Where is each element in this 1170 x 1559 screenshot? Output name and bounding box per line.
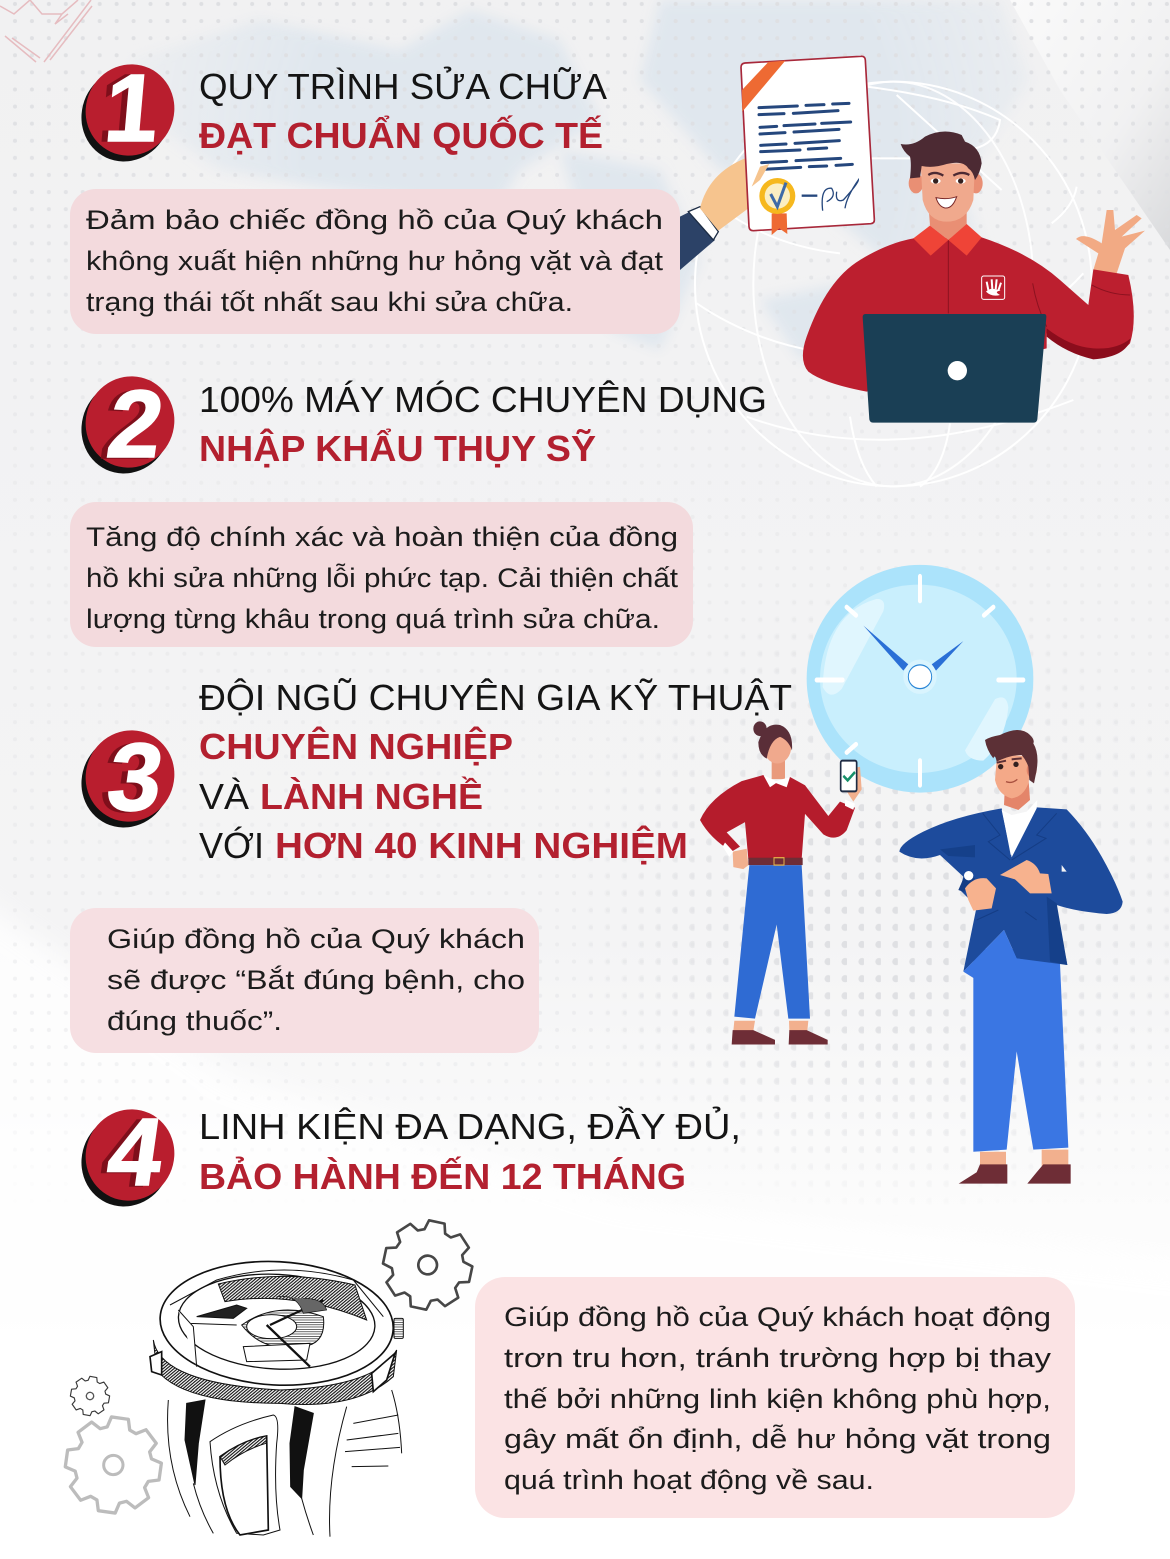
step 4 badge: 4 bbox=[101, 1099, 170, 1206]
man in red shirt with laptop bbox=[803, 132, 1145, 423]
step 2 description: lượng từng khâu trong quá trình sửa chữa. bbox=[86, 604, 660, 634]
hand holding certificate bbox=[680, 157, 769, 270]
step 2 badge bbox=[66, 362, 189, 488]
step 3 heading: VỚI bbox=[199, 825, 264, 866]
step 2 badge: 2 bbox=[95, 372, 164, 479]
gear gray bbox=[60, 1412, 167, 1518]
step 2 description: hồ khi sửa những lỗi phức tạp. Cải thiện chất bbox=[86, 562, 679, 593]
step 4 description: quá trình hoạt động về sau. bbox=[504, 1465, 874, 1495]
step 3 description: Giúp đồng hồ của Quý khách bbox=[107, 924, 525, 954]
step 1 description: Đảm bảo chiếc đồng hồ của Quý khách bbox=[86, 205, 663, 235]
step 2 heading: NHẬP KHẨU THỤY SỸ bbox=[199, 427, 596, 469]
laptop bbox=[863, 314, 1046, 423]
step 4 description: thế bởi những linh kiện không phù hợp, bbox=[504, 1384, 1051, 1414]
step 3 heading: ĐỘI NGŨ CHUYÊN GIA KỸ THUẬT bbox=[199, 677, 792, 718]
globe bbox=[695, 82, 1092, 487]
step 3 heading: LÀNH NGHỀ bbox=[260, 776, 483, 817]
step 1 description bbox=[70, 189, 680, 334]
step 4 description bbox=[475, 1277, 1075, 1518]
step 3 description: sẽ được “Bắt đúng bệnh, cho bbox=[107, 964, 525, 995]
step 3 heading: VÀ bbox=[199, 776, 249, 817]
step 4 description: trơn tru hơn, tránh trường hợp bị thay bbox=[504, 1343, 1052, 1373]
step 3 badge bbox=[66, 716, 189, 842]
step 4 description: Giúp đồng hồ của Quý khách hoạt động bbox=[504, 1302, 1051, 1332]
step 3 badge: 3 bbox=[95, 725, 164, 832]
watch bbox=[150, 1256, 403, 1537]
illustration: clock and woman bbox=[700, 565, 1033, 1044]
gear dark large bbox=[375, 1213, 480, 1317]
illustration: watch sketch with gears bbox=[60, 1213, 480, 1537]
step 1 heading: ĐẠT CHUẨN QUỐC TẾ bbox=[199, 114, 603, 156]
step 4 description: gây mất ổn định, dễ hư hỏng vặt trong bbox=[504, 1423, 1051, 1454]
certificate bbox=[741, 56, 874, 235]
step 1 badge: 1 bbox=[100, 55, 163, 162]
step 2 description bbox=[70, 502, 693, 647]
shirt logo bbox=[982, 276, 1005, 299]
step 4 heading: BẢO HÀNH ĐẾN 12 THÁNG bbox=[199, 1156, 686, 1197]
step 4 heading bbox=[199, 1105, 741, 1197]
step 1 badge bbox=[66, 50, 189, 176]
step 1 badge: 1 bbox=[94, 55, 157, 162]
step 1 description: trạng thái tốt nhất sau khi sửa chữa. bbox=[86, 287, 573, 317]
step 4 badge: 4 bbox=[95, 1100, 164, 1207]
step 3 heading bbox=[199, 677, 792, 866]
step 2 heading: 100% MÁY MÓC CHUYÊN DỤNG bbox=[199, 379, 767, 420]
decorative corner sketch bbox=[0, 0, 92, 62]
step 3 heading: HƠN 40 KINH NGHIỆM bbox=[275, 824, 688, 866]
step 1 heading: QUY TRÌNH SỬA CHỮA bbox=[199, 65, 607, 107]
woman in red shirt with phone bbox=[700, 721, 862, 1044]
step 1 heading bbox=[199, 65, 607, 156]
step 3 heading: CHUYÊN NGHIỆP bbox=[199, 725, 513, 767]
step 3 description: đúng thuốc”. bbox=[107, 1006, 282, 1036]
clock bbox=[807, 565, 1033, 793]
step 4 badge bbox=[66, 1095, 189, 1221]
background bbox=[0, 0, 1170, 1200]
step 3 badge: 3 bbox=[101, 724, 170, 831]
illustration: technician with certificate bbox=[680, 56, 1145, 487]
step 2 description: Tăng độ chính xác và hoàn thiện của đồng bbox=[86, 522, 678, 552]
step 1 description: không xuất hiện những hư hỏng vặt và đạt bbox=[86, 246, 664, 276]
gear small bbox=[68, 1374, 112, 1418]
step 3 description bbox=[70, 908, 539, 1053]
man in blue suit checking watch bbox=[899, 730, 1123, 1184]
step 4 heading: LINH KIỆN ĐA DẠNG, ĐẦY ĐỦ, bbox=[199, 1105, 741, 1147]
step 2 heading bbox=[199, 379, 767, 469]
step 2 badge: 2 bbox=[101, 371, 170, 478]
